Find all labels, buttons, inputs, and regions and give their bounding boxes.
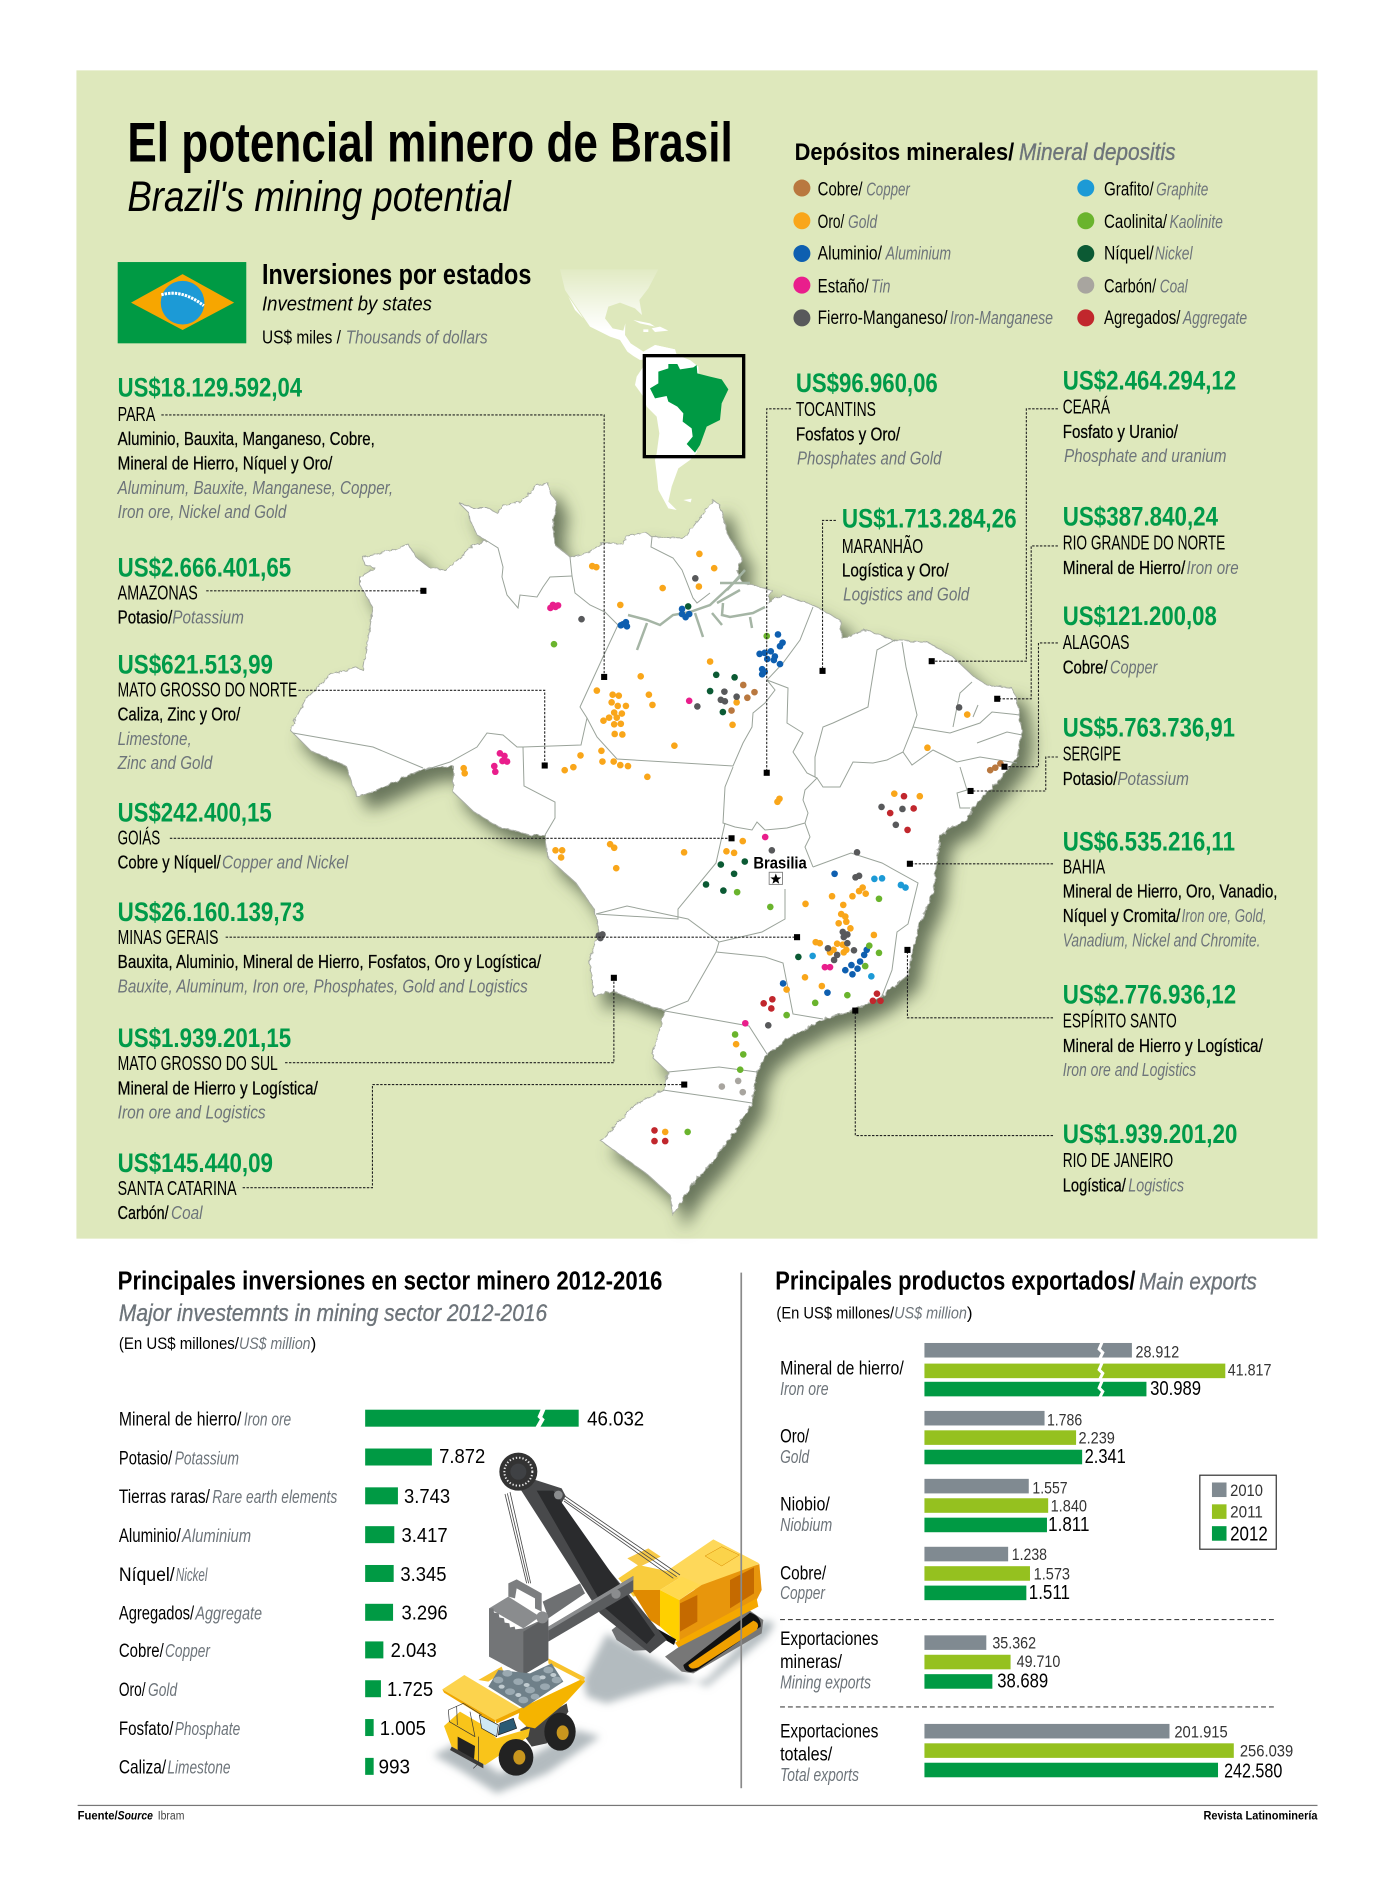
legend: mineral deposits: Aluminium bbox=[885, 244, 951, 264]
bar chart: main exports: Cobre/ bbox=[780, 1563, 827, 1585]
state: Mato Grosso do Norte bbox=[117, 649, 297, 773]
legend: mineral deposits: Kaolinite bbox=[1169, 212, 1223, 232]
bar chart: major investments: Nickel bbox=[176, 1565, 208, 1585]
state: Para: Iron ore, Nickel and Gold bbox=[118, 502, 287, 522]
heading: main investments: Major investemnts in mining sector 2012-2016 bbox=[119, 1300, 548, 1327]
bar chart: main exports: Iron ore bbox=[780, 1379, 829, 1399]
legend: years bbox=[1200, 1475, 1276, 1549]
state: Para: US$18.129.592,04 bbox=[118, 373, 302, 403]
state: Para: Aluminum, Bauxite, Manganese, Copper, bbox=[117, 478, 393, 498]
state: Mato Grosso do Norte: Caliza, Zinc y Oro/ bbox=[118, 705, 241, 725]
bar chart: major investments: Aggregate bbox=[195, 1604, 262, 1624]
legend: years: 2011 bbox=[1230, 1503, 1263, 1522]
state: Goias bbox=[118, 797, 349, 873]
state: Ceara: US$2.464.294,12 bbox=[1063, 365, 1236, 395]
bar chart: main exports: mineras/ bbox=[780, 1651, 842, 1673]
state: Goias: Copper and Nickel bbox=[222, 853, 349, 873]
bar chart: main exports: 28.912 bbox=[1136, 1343, 1179, 1362]
legend: mineral deposits: Cobre/ bbox=[818, 178, 863, 200]
heading: investment by states: Investment by states bbox=[262, 294, 432, 316]
heading: main investments bbox=[118, 1268, 662, 1353]
footer: Fuente/ bbox=[78, 1809, 118, 1823]
state: Mato Grosso do Norte: MATO GROSSO DO NORTE bbox=[118, 678, 297, 701]
legend: mineral deposits: Graphite bbox=[1156, 179, 1208, 199]
state: Bahia: Iron ore, Gold, bbox=[1182, 906, 1267, 926]
state: Sergipe: Potasio/ bbox=[1063, 769, 1118, 789]
state: Mato Grosso do Sul: US$1.939.201,15 bbox=[118, 1023, 291, 1053]
footer bbox=[78, 1805, 1318, 1823]
heading: main exports: Main exports bbox=[1139, 1269, 1257, 1296]
state: Para: PARA bbox=[118, 403, 155, 426]
state: Espirito Santo: US$2.776.936,12 bbox=[1063, 979, 1236, 1009]
state: Ceara: Fosfato y Uranio/ bbox=[1063, 422, 1179, 442]
state: Minas Gerais: US$26.160.139,73 bbox=[118, 897, 305, 927]
state: Alagoas: Cobre/ bbox=[1063, 657, 1108, 677]
state: Para bbox=[117, 373, 393, 522]
bar chart: major investments: Agregados/ bbox=[119, 1603, 195, 1625]
state: Tocantins: Phosphates and Gold bbox=[797, 449, 942, 469]
bar chart: major investments: 46.032 bbox=[587, 1407, 644, 1430]
divider between charts bbox=[740, 1273, 742, 1788]
bar chart: major investments: Caliza/ bbox=[119, 1757, 167, 1779]
state: Tocantins bbox=[796, 368, 942, 469]
state: Rio de Janeiro: RIO DE JANEIRO bbox=[1063, 1149, 1173, 1172]
state: Espirito Santo: Mineral de Hierro y Logística/ bbox=[1063, 1036, 1264, 1056]
state: Minas Gerais: Bauxite, Aluminum, Iron ore, Phosphates, Gold and Logistics bbox=[118, 976, 528, 996]
state: Mato Grosso do Sul bbox=[118, 1023, 319, 1123]
state: Tocantins: US$96.960,06 bbox=[796, 368, 938, 398]
label: Brasilia capital marker bbox=[753, 854, 807, 884]
bar chart: main exports bbox=[780, 1341, 1293, 1785]
bar chart: major investments: Limestone bbox=[167, 1758, 231, 1778]
state: Bahia: US$6.535.216,11 bbox=[1063, 826, 1235, 856]
legend: mineral deposits: Aggregate bbox=[1182, 308, 1247, 328]
bar chart: main exports: Total exports bbox=[780, 1765, 859, 1785]
state: Amazonas: Potassium bbox=[172, 608, 244, 628]
state: Para: Mineral de Hierro, Níquel y Oro/ bbox=[118, 453, 333, 473]
bar chart: main exports: 256.039 bbox=[1240, 1742, 1293, 1761]
state: Amazonas bbox=[118, 552, 291, 628]
state: Bahia: Níquel y Cromita/ bbox=[1063, 906, 1181, 926]
state: Sergipe: SERGIPE bbox=[1063, 743, 1121, 766]
bar chart: main exports: Copper bbox=[780, 1583, 826, 1603]
state: Maranhao bbox=[842, 504, 1017, 605]
bar chart: main exports: totales/ bbox=[780, 1743, 833, 1765]
bar chart: main exports: 30.989 bbox=[1150, 1377, 1201, 1400]
bar chart: major investments: Oro/ bbox=[119, 1679, 146, 1701]
bar chart: major investments: Aluminium bbox=[181, 1526, 251, 1546]
state: Maranhao: Logistics and Gold bbox=[843, 585, 970, 605]
connector lines from states to map bbox=[161, 409, 1058, 1188]
legend: mineral deposits: Níquel/ bbox=[1104, 243, 1154, 265]
subtitle: Brazil's mining potential bbox=[127, 173, 512, 220]
legend: years: 2012 bbox=[1230, 1523, 1268, 1546]
bar chart: major investments: 3.743 bbox=[404, 1485, 450, 1508]
bar chart: major investments: Potasio/ bbox=[119, 1447, 173, 1469]
legend: mineral deposits: Estaño/ bbox=[818, 275, 869, 297]
bar chart: major investments: 1.725 bbox=[387, 1678, 433, 1701]
bar chart: main exports: Niobio/ bbox=[780, 1493, 830, 1515]
heading: investment by states: Thousands of dollars bbox=[346, 327, 488, 347]
bar chart: major investments: 1.005 bbox=[380, 1717, 426, 1740]
legend: mineral deposits: Tin bbox=[871, 276, 890, 296]
heading: investment by states: US$ miles / bbox=[262, 327, 342, 347]
bar chart: major investments: Mineral de hierro/ bbox=[119, 1408, 242, 1430]
state: Rio Grande do Norte: US$387.840,24 bbox=[1063, 501, 1218, 531]
state: Amazonas: Potasio/ bbox=[118, 608, 173, 628]
state: Amazonas: US$2.666.401,65 bbox=[118, 552, 291, 582]
state: Espirito Santo: Iron ore and Logistics bbox=[1063, 1060, 1196, 1080]
state: Ceara bbox=[1063, 365, 1236, 466]
bar chart: main exports: 2.341 bbox=[1085, 1445, 1126, 1468]
state: Espirito Santo bbox=[1063, 979, 1264, 1080]
bar chart: major investments: Gold bbox=[148, 1680, 178, 1700]
state: Tocantins: TOCANTINS bbox=[796, 398, 876, 421]
heading: main exports: Principales productos exportados/ bbox=[775, 1268, 1136, 1296]
state: Ceara: CEARÁ bbox=[1063, 396, 1110, 419]
bar chart: major investments: 7.872 bbox=[439, 1445, 485, 1468]
legend: mineral deposits: Coal bbox=[1160, 276, 1188, 296]
bar chart: main exports: 41.817 bbox=[1228, 1361, 1271, 1380]
state: Alagoas: Copper bbox=[1110, 657, 1158, 677]
bar chart: main exports: 2.239 bbox=[1079, 1429, 1115, 1448]
bar chart: main exports: Mining exports bbox=[780, 1673, 871, 1693]
state: Minas Gerais: MINAS GERAIS bbox=[118, 926, 218, 949]
footer: Ibram bbox=[158, 1809, 184, 1823]
bar chart: major investments: Tierras raras/ bbox=[119, 1486, 210, 1508]
legend: mineral deposits: Gold bbox=[848, 212, 878, 232]
state: Minas Gerais bbox=[118, 897, 542, 996]
state: Rio de Janeiro bbox=[1063, 1119, 1237, 1195]
state: Mato Grosso do Sul: Iron ore and Logistics bbox=[118, 1103, 266, 1123]
state: Rio Grande do Norte: Iron ore bbox=[1186, 558, 1239, 578]
state: Mato Grosso do Norte: Zinc and Gold bbox=[117, 753, 213, 773]
bar chart: main exports: Niobium bbox=[780, 1515, 832, 1535]
legend: mineral deposits: Grafito/ bbox=[1104, 178, 1154, 200]
bar chart: main exports: 1.557 bbox=[1032, 1478, 1068, 1497]
state: Santa Catarina bbox=[118, 1148, 273, 1223]
bar chart: major investments: Iron ore bbox=[244, 1409, 291, 1429]
bar chart: major investments: 3.417 bbox=[402, 1524, 448, 1547]
state: Sergipe bbox=[1063, 712, 1235, 789]
legend: mineral deposits: Nickel bbox=[1155, 244, 1193, 264]
state: Espirito Santo: ESPÍRITO SANTO bbox=[1063, 1010, 1177, 1033]
bar chart: main exports: 35.362 bbox=[992, 1634, 1036, 1653]
heading: main investments: ) bbox=[311, 1334, 316, 1353]
legend: mineral deposits: Copper bbox=[866, 179, 911, 199]
legend: mineral deposits: Caolinita/ bbox=[1104, 211, 1168, 233]
state: Mato Grosso do Norte: US$621.513,99 bbox=[118, 649, 273, 679]
state: Rio de Janeiro: Logistics bbox=[1128, 1175, 1184, 1195]
heading: main exports: (En US$ millones/ bbox=[776, 1304, 894, 1323]
bar chart: major investments: Cobre/ bbox=[119, 1640, 164, 1662]
bar chart: main exports: Mineral de hierro/ bbox=[780, 1358, 904, 1380]
legend: mineral deposits: Oro/ bbox=[818, 211, 845, 233]
state: Maranhao: MARANHÃO bbox=[842, 534, 923, 558]
state: Mato Grosso do Sul: MATO GROSSO DO SUL bbox=[118, 1052, 278, 1075]
state: Mato Grosso do Sul: Mineral de Hierro y Logística/ bbox=[118, 1078, 319, 1098]
bar chart: major investments: Rare earth elements bbox=[212, 1487, 337, 1507]
title: El potencial minero de Brasil bbox=[127, 110, 733, 173]
bar chart: major investments: 993 bbox=[379, 1756, 410, 1779]
heading: main investments: US$ million bbox=[239, 1334, 311, 1353]
bar chart: main exports: 1.511 bbox=[1029, 1581, 1070, 1604]
state: Mato Grosso do Norte: Limestone, bbox=[118, 729, 192, 749]
bar chart: main exports: 201.915 bbox=[1174, 1722, 1228, 1741]
bar chart: main exports: Oro/ bbox=[780, 1425, 810, 1447]
bar chart: major investments: Aluminio/ bbox=[119, 1525, 181, 1547]
bar chart: major investments: Phosphate bbox=[175, 1719, 240, 1739]
legend: mineral deposits: Iron-Manganese bbox=[950, 308, 1053, 328]
legend: mineral deposits: Carbón/ bbox=[1104, 275, 1157, 297]
state: Maranhao: US$1.713.284,26 bbox=[842, 504, 1017, 534]
footer: Source bbox=[118, 1809, 153, 1823]
bar chart: main exports: 38.689 bbox=[997, 1670, 1048, 1693]
state: Santa Catarina: SANTA CATARINA bbox=[118, 1177, 237, 1200]
state: Santa Catarina: Coal bbox=[171, 1203, 203, 1223]
illustration: excavator loading a dump truck bbox=[433, 1453, 775, 1793]
map: Brazil with states and mineral deposits bbox=[290, 483, 1022, 1215]
heading: investment by states: Inversiones por estados bbox=[262, 259, 531, 291]
state: Goias: GOIÁS bbox=[118, 826, 160, 849]
bar chart: main exports: Exportaciones bbox=[780, 1628, 878, 1650]
bar chart: main exports: Exportaciones bbox=[780, 1720, 878, 1742]
state: Goias: US$242.400,15 bbox=[118, 797, 272, 827]
heading: investment by states bbox=[262, 259, 531, 347]
footer: Revista Latinominería bbox=[1203, 1809, 1318, 1823]
legend: mineral deposits: Aluminio/ bbox=[818, 243, 882, 265]
state: Maranhao: Logística y Oro/ bbox=[842, 560, 949, 580]
bar chart: main exports: 242.580 bbox=[1224, 1759, 1282, 1782]
state: Alagoas bbox=[1063, 601, 1217, 677]
legend: mineral deposits bbox=[793, 139, 1247, 329]
legend: mineral deposits: Fierro-Manganeso/ bbox=[818, 307, 948, 329]
state: Rio Grande do Norte: Mineral de Hierro/ bbox=[1063, 558, 1186, 578]
icon: Brazilian flag bbox=[118, 262, 246, 343]
legend: mineral deposits: Mineral depositis bbox=[1019, 139, 1176, 166]
state: Bahia: BAHIA bbox=[1063, 855, 1105, 878]
state: Santa Catarina: US$145.440,09 bbox=[118, 1148, 273, 1178]
state: Bahia bbox=[1063, 826, 1277, 950]
bar chart: main exports: 1.811 bbox=[1048, 1513, 1089, 1536]
bar chart: main exports: 1.840 bbox=[1051, 1497, 1087, 1516]
bar chart: major investments: 2.043 bbox=[391, 1639, 437, 1662]
bar chart: main exports: 1.238 bbox=[1012, 1545, 1047, 1564]
bar chart: major investments: Níquel/ bbox=[119, 1564, 175, 1586]
state: Amazonas: AMAZONAS bbox=[118, 581, 198, 604]
excavator upper beam bbox=[543, 1583, 585, 1618]
bar chart: major investments: Copper bbox=[165, 1641, 211, 1661]
legend: mineral deposits: Depósitos minerales/ bbox=[795, 139, 1014, 166]
locator: Americas with Brazil highlighted bbox=[560, 269, 744, 510]
bar chart: major investments: Potassium bbox=[175, 1448, 239, 1468]
state: Ceara: Phosphate and uranium bbox=[1064, 446, 1227, 466]
state: Alagoas: US$121.200,08 bbox=[1063, 601, 1217, 631]
heading: main exports: US$ million bbox=[894, 1304, 967, 1323]
state: Santa Catarina: Carbón/ bbox=[118, 1203, 169, 1223]
heading: main exports bbox=[775, 1268, 1257, 1323]
heading: main investments: Principales inversiones en sector minero 2012-2016 bbox=[118, 1268, 662, 1296]
bar chart: main exports: Gold bbox=[780, 1447, 810, 1467]
heading: main exports: ) bbox=[967, 1304, 973, 1323]
legend: years: 2010 bbox=[1230, 1481, 1263, 1500]
legend: mineral deposits: Agregados/ bbox=[1104, 307, 1181, 329]
bar chart: major investments: 3.345 bbox=[400, 1563, 446, 1586]
bar chart: main exports: 1.573 bbox=[1034, 1565, 1070, 1584]
bar chart: main exports: 49.710 bbox=[1017, 1652, 1060, 1671]
state: Alagoas: ALAGOAS bbox=[1063, 631, 1129, 654]
state: Rio Grande do Norte bbox=[1063, 501, 1239, 578]
bar chart: main exports: 1.786 bbox=[1047, 1410, 1082, 1429]
state: Sergipe: Potassium bbox=[1117, 769, 1189, 789]
state: Goias: Cobre y Níquel/ bbox=[118, 853, 222, 873]
state: Rio de Janeiro: Logística/ bbox=[1063, 1175, 1127, 1195]
state: Bahia: Mineral de Hierro, Oro, Vanadio, bbox=[1063, 882, 1277, 902]
state: Para: Aluminio, Bauxita, Manganeso, Cobre, bbox=[118, 429, 375, 449]
bar chart: major investments: 3.296 bbox=[402, 1602, 448, 1625]
label: Brasilia capital marker: Brasilia bbox=[753, 854, 807, 873]
state: Bahia: Vanadium, Nickel and Chromite. bbox=[1063, 930, 1260, 950]
state: Sergipe: US$5.763.736,91 bbox=[1063, 712, 1235, 742]
state: Rio Grande do Norte: RIO GRANDE DO NORTE bbox=[1063, 532, 1225, 555]
bar chart: major investments: Fosfato/ bbox=[119, 1718, 174, 1740]
excavator rear track bbox=[612, 1623, 650, 1651]
state: Rio de Janeiro: US$1.939.201,20 bbox=[1063, 1119, 1237, 1149]
state: Tocantins: Fosfatos y Oro/ bbox=[796, 424, 901, 444]
bar chart: major investments bbox=[119, 1407, 644, 1779]
heading: main investments: (En US$ millones/ bbox=[119, 1334, 239, 1353]
panel: map background bbox=[76, 70, 1318, 1239]
state: Minas Gerais: Bauxita, Aluminio, Mineral de Hierro, Fosfatos, Oro y Logística/ bbox=[118, 952, 542, 972]
